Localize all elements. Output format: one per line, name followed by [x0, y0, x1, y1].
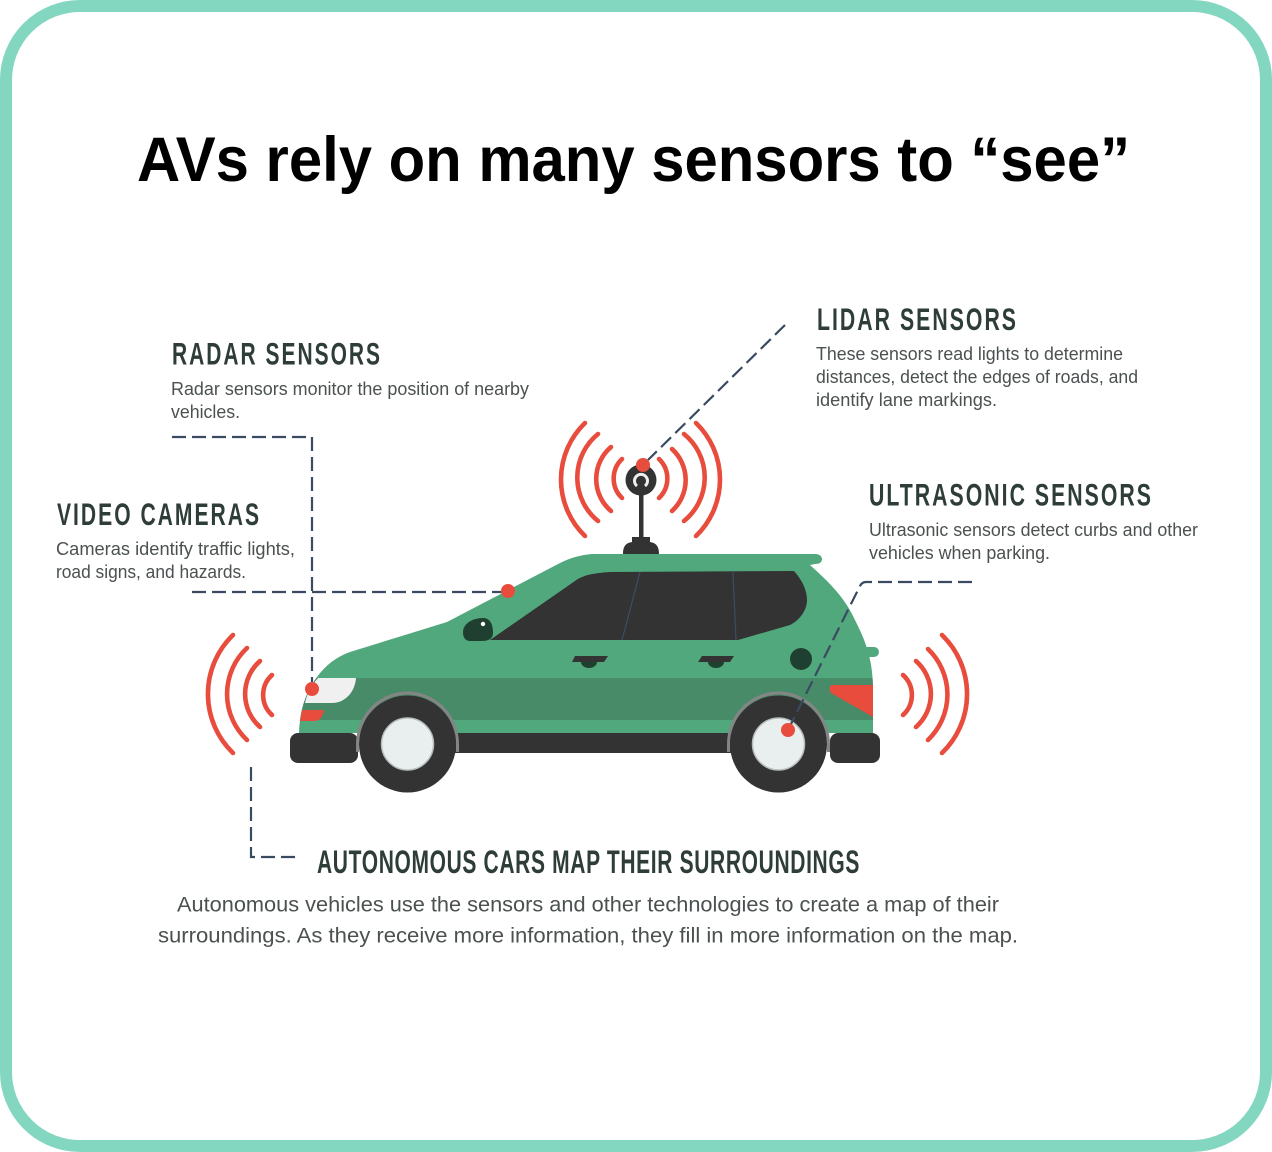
rear bumper — [830, 733, 880, 763]
text block: lidar sensors: LIDAR SENSORS — [817, 301, 1018, 337]
front bumper — [290, 733, 358, 763]
text block: radar sensors: vehicles. — [171, 402, 240, 422]
front indicator — [300, 710, 324, 721]
car body — [299, 554, 873, 733]
text block: radar sensors — [171, 336, 529, 422]
side mirror — [463, 618, 493, 641]
text block: lidar sensors: distances, detect the edges of roads, and — [816, 367, 1138, 387]
headlight — [305, 678, 356, 703]
roof antenna — [623, 464, 659, 554]
text block: radar sensors: RADAR SENSORS — [172, 336, 382, 372]
underbody bar — [450, 733, 740, 753]
text block: ultrasonic sensors: Ultrasonic sensors detect curbs and other — [869, 520, 1198, 540]
rear signal waves — [903, 635, 967, 753]
text block: autonomous cars map: AUTONOMOUS CARS MAP THEIR SURROUNDINGS — [317, 844, 860, 880]
body side stripe — [295, 678, 877, 720]
front signal waves — [208, 635, 272, 753]
title: AVs rely on many sensors to “see” — [137, 125, 1130, 195]
text block: video cameras — [56, 496, 295, 582]
text block: autonomous cars map: Autonomous vehicles use the sensors and other technologies to create a map of their — [177, 892, 999, 916]
text block: lidar sensors: identify lane markings. — [816, 390, 997, 410]
text block: ultrasonic sensors: vehicles when parking. — [869, 543, 1050, 563]
text block: video cameras: VIDEO CAMERAS — [57, 496, 261, 532]
rear wheel — [728, 693, 828, 792]
windows — [490, 571, 807, 640]
text block: video cameras: road signs, and hazards. — [56, 562, 246, 582]
text block: autonomous cars map — [158, 844, 1018, 948]
front wheel — [358, 693, 458, 792]
door handles — [572, 656, 734, 662]
antenna signal waves — [561, 423, 720, 536]
car illustration — [290, 464, 880, 792]
text block: lidar sensors — [816, 301, 1138, 410]
text block: video cameras: Cameras identify traffic lights, — [56, 539, 295, 559]
text block: ultrasonic sensors — [869, 476, 1198, 563]
rear marker tab — [860, 647, 879, 657]
text block: radar sensors: Radar sensors monitor the position of nearby — [171, 379, 529, 399]
sensor dots — [305, 458, 795, 737]
tail light — [830, 685, 873, 717]
text block: autonomous cars map: surroundings. As they receive more information, they fill in more information on the map. — [158, 924, 1018, 948]
leader lines — [172, 325, 972, 857]
text block: lidar sensors: These sensors read lights to determine — [816, 344, 1123, 364]
window pillars — [622, 572, 736, 640]
fuel cap — [790, 648, 812, 670]
